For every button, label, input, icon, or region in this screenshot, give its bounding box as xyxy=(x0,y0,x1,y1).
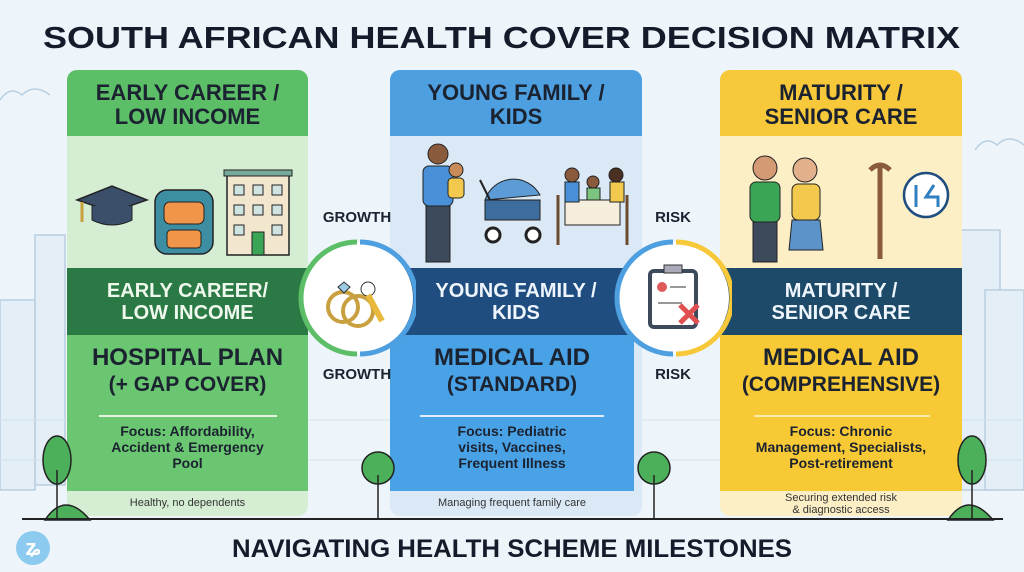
plan: (+ GAP COVER) xyxy=(109,373,266,396)
icon: rings and key xyxy=(298,240,416,356)
panel: maturity xyxy=(720,70,962,516)
footer: Healthy, no dependents xyxy=(130,497,245,509)
header xyxy=(67,70,308,136)
panel: maturity: MEDICAL AID xyxy=(763,344,919,371)
panel: maturity: SENIOR CARE xyxy=(772,302,910,324)
growth connector xyxy=(298,209,416,383)
growth connector: GROWTH xyxy=(323,209,391,226)
plan: HOSPITAL PLAN xyxy=(92,344,283,371)
panel: maturity: Management, Specialists, xyxy=(756,439,926,455)
icon: clipboard with cross xyxy=(614,240,732,356)
risk connector xyxy=(614,209,732,383)
panel: maturity: & diagnostic access xyxy=(792,504,890,516)
panel: young family: YOUNG FAMILY / xyxy=(427,80,605,105)
panel: maturity: Focus: Chronic xyxy=(790,423,892,439)
panel: young family: Focus: Pediatric xyxy=(458,423,566,439)
panel: maturity: Post-retirement xyxy=(789,455,893,471)
panel: maturity: MATURITY / xyxy=(785,280,897,302)
trees xyxy=(22,435,1003,521)
panel: young family: Managing frequent family care xyxy=(438,497,586,509)
risk connector: RISK xyxy=(655,366,691,383)
panel: young family: (STANDARD) xyxy=(447,373,577,396)
panel: young family: KIDS xyxy=(492,302,540,324)
panel: young family xyxy=(390,70,642,516)
plan xyxy=(67,335,308,491)
panel: early career xyxy=(67,70,308,516)
icons: cap, backpack, building xyxy=(75,170,292,256)
panel: young family: visits, Vaccines, xyxy=(458,439,566,455)
risk connector: RISK xyxy=(655,209,691,226)
icons: parent, stroller, family table xyxy=(422,144,628,262)
growth connector: GROWTH xyxy=(323,366,391,383)
plan: Focus: Affordability, xyxy=(120,423,255,439)
header: LOW INCOME xyxy=(115,104,260,129)
header: EARLY CAREER / xyxy=(96,80,279,105)
icons: seniors, cane, wrench badge xyxy=(750,156,950,262)
logo xyxy=(16,531,50,565)
panel: young family: MEDICAL AID xyxy=(434,344,590,371)
panel: maturity: (COMPREHENSIVE) xyxy=(742,373,940,396)
panel: young family: Frequent Illness xyxy=(458,455,566,471)
plan: Accident & Emergency xyxy=(111,439,264,455)
panel: young family: KIDS xyxy=(490,104,542,129)
band: EARLY CAREER/ xyxy=(107,280,268,302)
plan: Pool xyxy=(172,455,203,471)
band xyxy=(67,268,308,335)
band: LOW INCOME xyxy=(121,302,254,324)
panel: maturity: MATURITY / xyxy=(779,80,903,105)
panel: young family: YOUNG FAMILY / xyxy=(435,280,597,302)
title: SOUTH AFRICAN HEALTH COVER DECISION MATRIX xyxy=(43,20,960,55)
bottom caption: NAVIGATING HEALTH SCHEME MILESTONES xyxy=(232,535,792,563)
panel: maturity: Securing extended risk xyxy=(785,492,897,504)
logo: ʑ xyxy=(26,535,40,560)
panel: maturity: SENIOR CARE xyxy=(765,104,917,129)
